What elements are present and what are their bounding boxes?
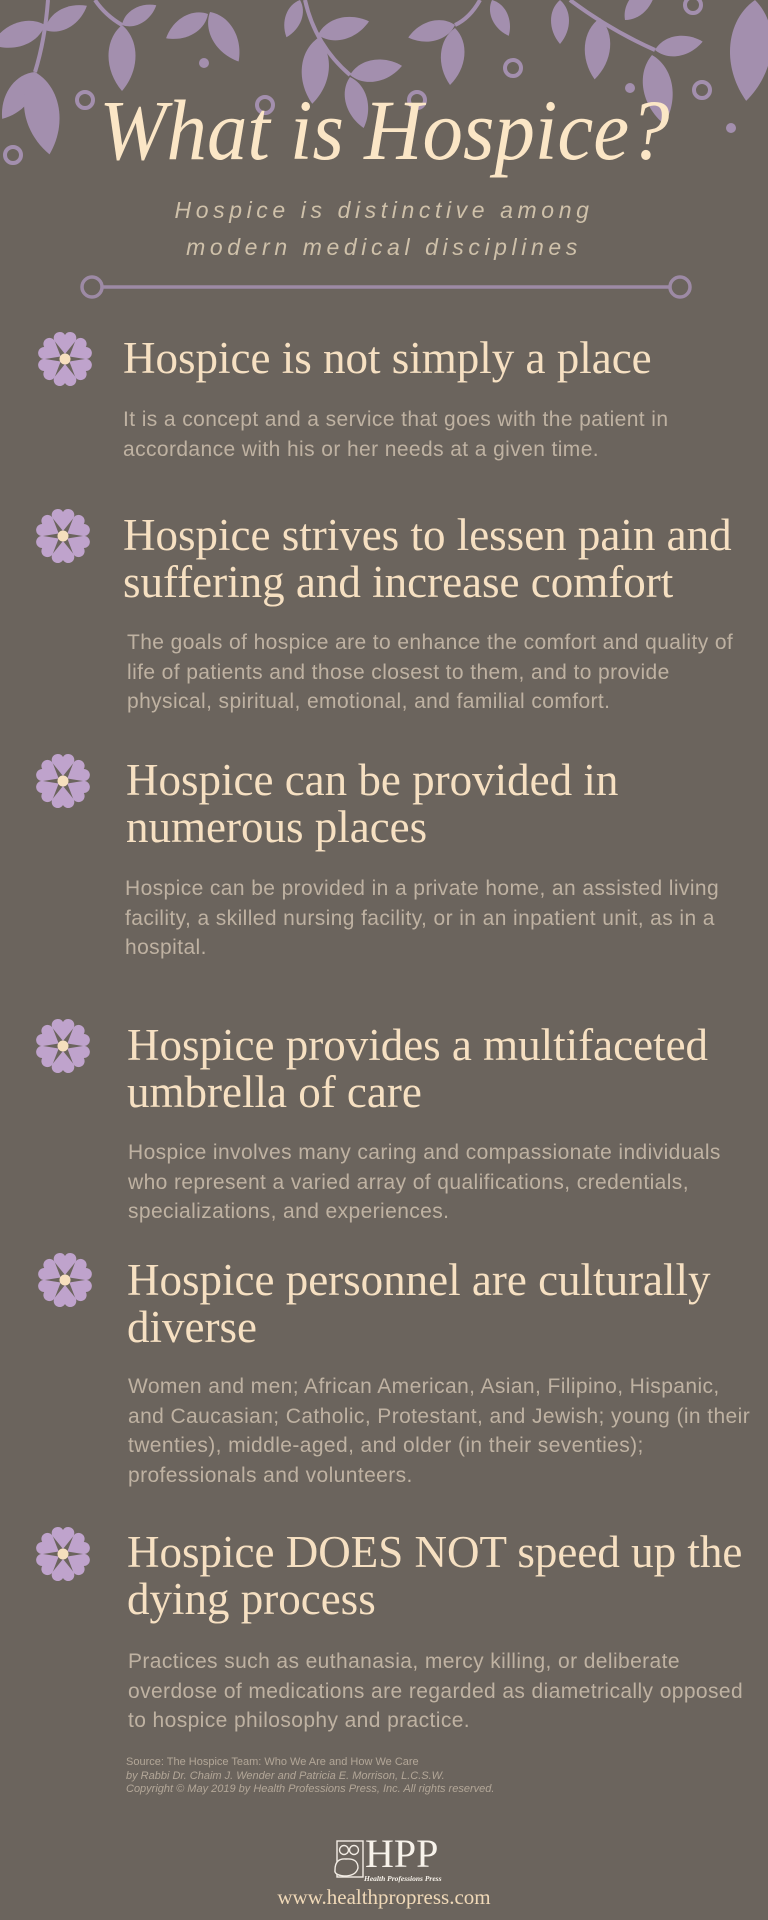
body text: Hospice involves many caring and compassionate individuals [128,1141,721,1164]
logo text: HPP [365,1831,438,1876]
body text: Women and men; African American, Asian, Filipino, Hispanic, [128,1375,720,1398]
heading [127,1255,711,1352]
heading: Hospice DOES NOT speed up the [127,1527,742,1577]
icon: flower [36,509,90,563]
heading: Hospice provides a multifaceted [127,1020,708,1070]
heading [126,755,618,852]
heading: numerous places [126,802,427,852]
body text: facility, a skilled nursing facility, or in an inpatient unit, as in a [125,906,715,930]
heading [127,1020,708,1117]
subtitle [174,197,593,260]
decorative leaves header [0,0,768,165]
section 2 [36,509,733,713]
icon: flower [36,754,90,808]
heading: umbrella of care [127,1067,422,1117]
heading: dying process [127,1574,376,1624]
body text: accordance with his or her needs at a given time. [123,438,599,460]
body text: The goals of hospice are to enhance the comfort and quality of [127,631,733,654]
source credits: Source: The Hospice Team: Who We Are and How We Care [126,1756,419,1768]
body text [128,1141,721,1223]
heading: Hospice is not simply a place [123,333,652,383]
body text [128,1375,750,1486]
body text [128,1650,743,1732]
body text [125,877,719,959]
icon: people box [334,1840,364,1878]
body text: Hospice can be provided in a private home, an assisted living [125,877,719,900]
icon: flower [38,1253,92,1307]
body text: life of patients and those closest to them, and to provide [127,660,670,684]
body text: It is a concept and a service that goes with the patient in [123,408,668,431]
source credits: by Rabbi Dr. Chaim J. Wender and Patricia E. Morrison, L.C.S.W. [126,1770,445,1782]
body text: Practices such as euthanasia, mercy killing, or deliberate [128,1650,680,1673]
body text: overdose of medications are regarded as diametrically opposed [128,1680,743,1702]
logo: HPP: Health Professions Press [364,1874,442,1883]
website url: www.healthpropress.com [277,1885,491,1909]
body text: who represent a varied array of qualifications, credentials, [128,1170,689,1194]
heading: Hospice personnel are culturally [127,1255,711,1305]
body text: professionals and volunteers. [128,1464,413,1486]
icon: flower [36,1527,90,1581]
source credits [126,1756,494,1795]
body text: physical, spiritual, emotional, and familial comfort. [127,690,610,713]
divider [80,275,692,299]
heading: diverse [127,1302,257,1352]
body text: and Caucasian; Catholic, Protestant, and Jewish; young (in their [128,1404,750,1428]
icon: flower [36,1019,90,1073]
body text [127,631,733,713]
section 4 [36,1019,721,1223]
heading: suffering and increase comfort [123,557,673,607]
title: What is Hospice? [99,82,669,178]
heading [127,1527,742,1624]
heading [123,510,732,607]
logo: HPP [334,1831,442,1883]
section 5 [38,1253,750,1486]
body text: hospital. [125,936,207,959]
body text: to hospice philosophy and practice. [128,1709,470,1732]
icon: flower [38,332,92,386]
section 3 [36,754,719,959]
section 1 [38,332,668,460]
body text: twenties), middle-aged, and older (in their seventies); [128,1434,644,1457]
heading: Hospice can be provided in [126,755,618,805]
source credits: Copyright © May 2019 by Health Professions Press, Inc. All rights reserved. [126,1783,494,1795]
body text: specializations, and experiences. [128,1200,449,1223]
body text [123,408,668,460]
heading: Hospice strives to lessen pain and [123,510,732,560]
subtitle: modern medical disciplines [186,234,582,260]
subtitle: Hospice is distinctive among [174,197,593,223]
section 6 [36,1527,743,1732]
